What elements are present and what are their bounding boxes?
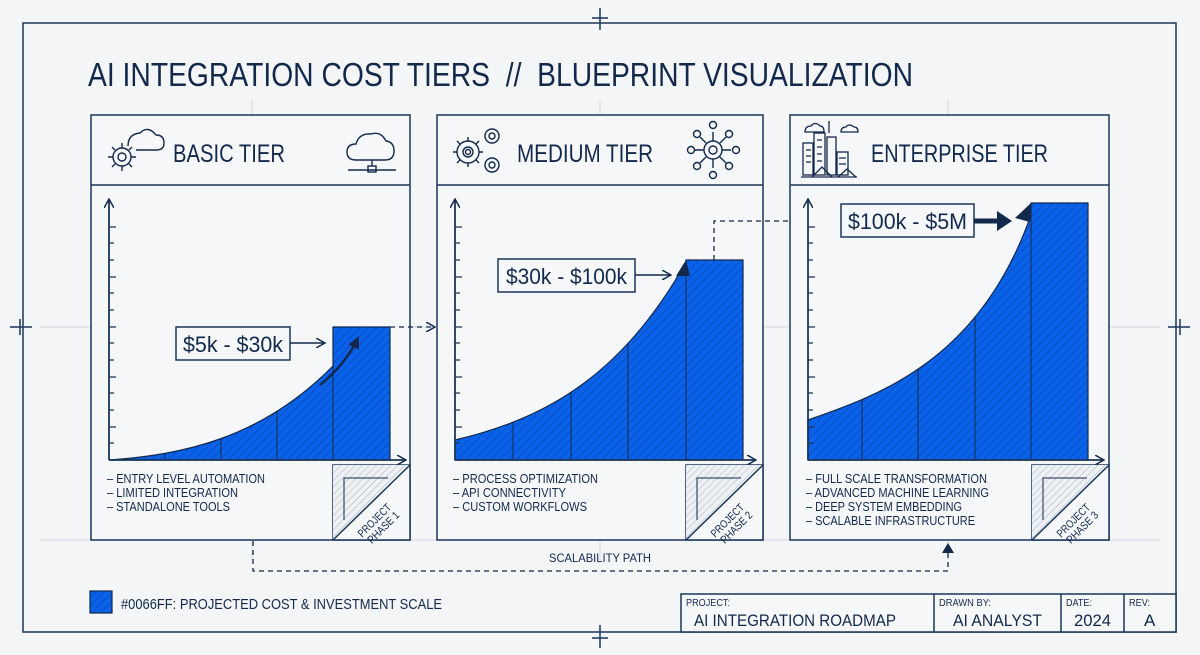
text block: enterprise features: – FULL SCALE TRANSFORMATION	[806, 472, 987, 486]
callout: enterprise cost: $100k - $5M	[848, 209, 967, 234]
arrow: basic to medium	[390, 326, 434, 328]
text block: basic features: – LIMITED INTEGRATION	[107, 486, 238, 500]
text block: medium features: – API CONNECTIVITY	[453, 486, 567, 500]
phase stamp 2	[686, 465, 763, 546]
legend: #0066FF: PROJECTED COST & INVESTMENT SCALE	[121, 596, 442, 613]
arrow: medium to enterprise	[714, 221, 834, 260]
phase stamp 1	[333, 465, 410, 546]
callout: enterprise cost	[841, 203, 1031, 237]
title block: AI INTEGRATION ROADMAP	[694, 611, 896, 630]
callout: basic cost	[176, 327, 324, 360]
icon: city	[801, 121, 858, 177]
chart: enterprise	[808, 200, 1103, 460]
text block: basic features	[107, 472, 265, 514]
title block	[681, 594, 1176, 632]
phase stamp 3: PROJECT	[1055, 502, 1093, 540]
phase stamp 2: PHASE 2	[718, 509, 755, 546]
phase stamp 3: PHASE 3	[1064, 509, 1101, 546]
panel: medium tier	[437, 115, 763, 546]
legend	[90, 591, 442, 613]
icon: cloud network	[347, 133, 396, 172]
text block: medium features: – PROCESS OPTIMIZATION	[453, 472, 598, 486]
phase stamp 3	[1032, 465, 1109, 546]
callout: medium cost	[498, 259, 690, 292]
text block: enterprise features: – SCALABLE INFRASTRUCTURE	[806, 514, 975, 528]
panel: enterprise tier	[790, 115, 1109, 546]
text block: basic features: – STANDALONE TOOLS	[107, 500, 230, 514]
text block: medium features	[453, 472, 598, 514]
phase stamp 2: PROJECT	[709, 502, 747, 540]
heading: MEDIUM TIER	[517, 140, 653, 168]
arrow: scalability path: SCALABILITY PATH	[549, 551, 651, 565]
title block: DRAWN BY:	[939, 598, 991, 609]
title block: DATE:	[1066, 598, 1092, 609]
title block: REV:	[1129, 598, 1150, 609]
panel: basic tier	[91, 115, 410, 546]
arrow: scalability path	[253, 541, 954, 571]
callout: medium cost: $30k - $100k	[506, 264, 628, 289]
callout: basic cost: $5k - $30k	[183, 332, 284, 357]
heading: ENTERPRISE TIER	[871, 140, 1048, 168]
phase stamp 1: PROJECT	[356, 502, 394, 540]
text block: enterprise features: – ADVANCED MACHINE LEARNING	[806, 486, 989, 500]
chart: medium	[455, 200, 755, 460]
heading: BASIC TIER	[173, 140, 285, 168]
text block: enterprise features: – DEEP SYSTEM EMBEDDING	[806, 500, 962, 514]
text block: basic features: – ENTRY LEVEL AUTOMATION	[107, 472, 265, 486]
title: AI INTEGRATION COST TIERS // BLUEPRINT VISUALIZATION	[88, 56, 913, 93]
chart: basic	[109, 200, 405, 460]
title block: PROJECT:	[686, 598, 730, 609]
phase stamp 1: PHASE 1	[365, 509, 402, 546]
grid lines decorative	[40, 100, 1160, 560]
title block: A	[1144, 611, 1156, 630]
icon: network hub	[688, 122, 740, 178]
text block: medium features: – CUSTOM WORKFLOWS	[453, 500, 587, 514]
title block: AI ANALYST	[953, 611, 1042, 630]
title block: 2024	[1074, 611, 1111, 630]
text block: enterprise features	[806, 472, 989, 528]
icon: gear cloud	[108, 129, 164, 171]
icon: gears	[453, 129, 499, 172]
